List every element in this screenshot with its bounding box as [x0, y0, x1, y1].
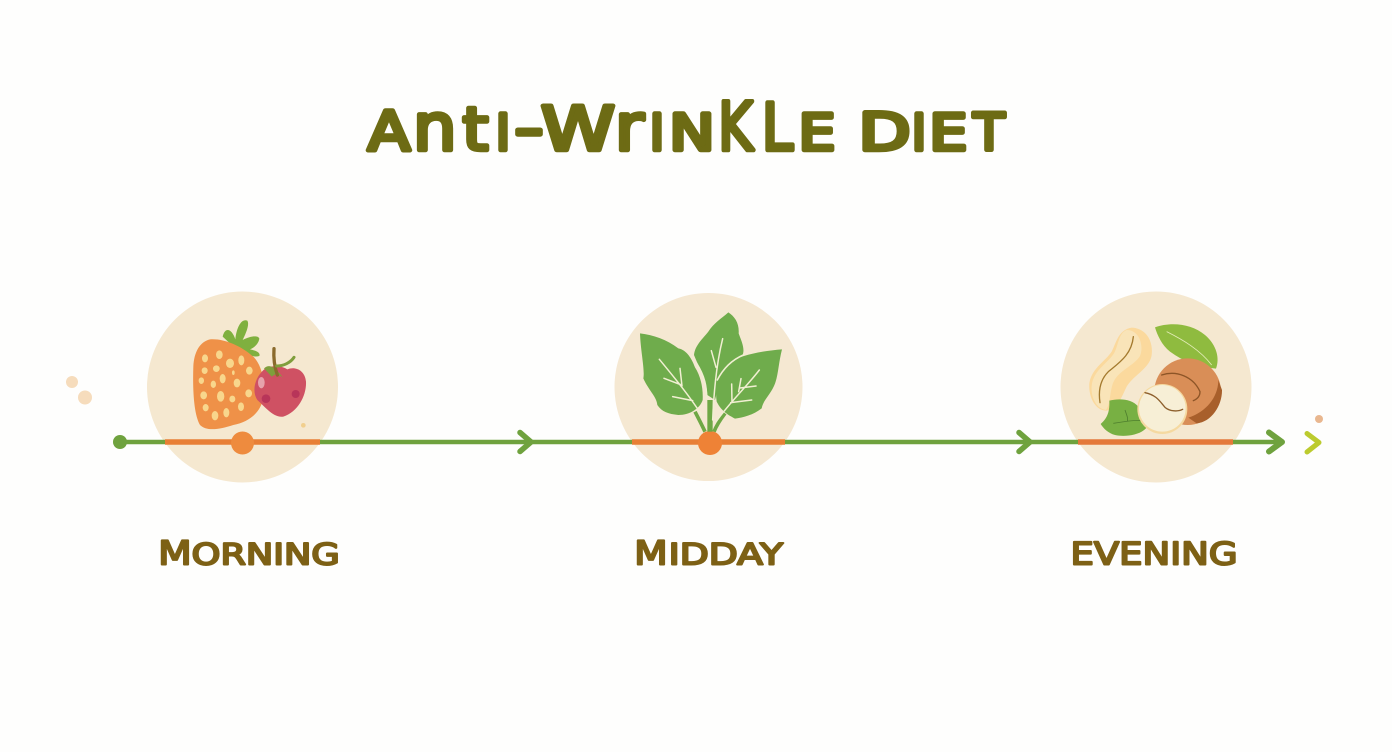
label: midday [634, 534, 783, 572]
title: N [669, 104, 715, 162]
label: midday: IDDAY [669, 538, 783, 572]
title: W [541, 94, 615, 165]
title: E [798, 104, 836, 162]
timeline [113, 431, 1282, 455]
icon: leafy greens [640, 312, 782, 432]
title: E [929, 104, 968, 162]
decorative dot right [1315, 415, 1323, 423]
title: n [413, 91, 457, 166]
title: t [462, 95, 488, 165]
icon: nuts [1089, 324, 1222, 436]
icon: end chevron [1307, 434, 1319, 452]
panel: midday circle [614, 293, 802, 481]
decorative dots left [66, 376, 92, 404]
panel: evening circle [1060, 292, 1252, 482]
title: K [718, 88, 754, 166]
title: I [912, 104, 926, 162]
label: morning: ORNING [192, 538, 340, 572]
title: r [615, 91, 644, 166]
title [368, 88, 1005, 166]
title: T [972, 104, 1005, 163]
title: L [762, 91, 793, 166]
panel: morning circle [147, 292, 338, 482]
title: I [650, 104, 664, 162]
title: I [496, 104, 510, 162]
title: - [514, 93, 544, 163]
title: A [368, 100, 410, 163]
label: evening: EVENING [1070, 536, 1238, 572]
label: morning: M [158, 534, 192, 572]
label: midday: M [634, 534, 668, 572]
label: morning [158, 534, 340, 572]
title: D [859, 103, 911, 163]
icon: strawberries [193, 320, 306, 429]
